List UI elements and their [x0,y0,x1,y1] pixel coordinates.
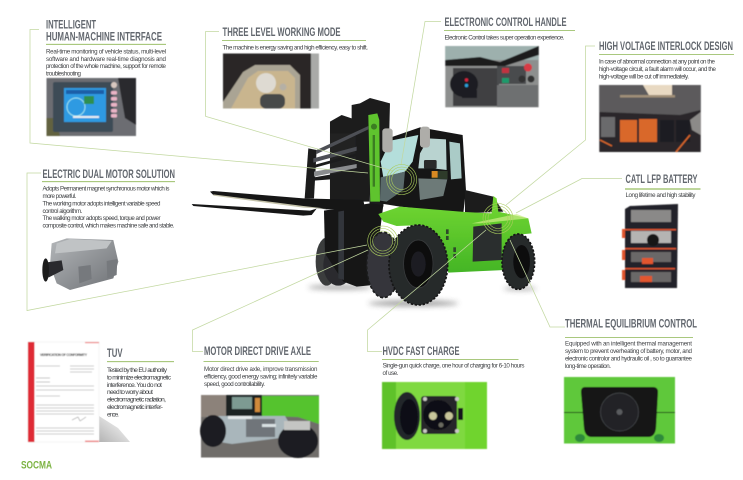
text block: Equipped with an intelligent thermal management [565,341,692,348]
leader: dual motor [27,173,367,310]
photo: HV connectors [599,85,701,152]
mirrors [382,127,430,152]
text block: electromagnetic radiation, [107,397,166,404]
callout ring: battery [483,204,513,234]
panel: three level working mode [222,27,368,108]
text block: Single-gun quick charge, one hour of charging for 6-10 hours [382,362,524,370]
mast rear [330,98,390,210]
leader: drive axle [192,250,368,352]
photo: touch display [46,78,136,136]
text block: high-voltage circuit, a fault alarm will occur, and the [599,66,717,73]
logo: SOCMA [21,460,52,472]
panel: intelligent human-machine interface [46,20,167,136]
green mast strip [368,113,380,202]
text block: electromagnetic interfer- [107,404,163,411]
leader: intelligent interface [30,30,368,173]
text block: Adopts Permanent magnet synchronous motor which is [42,186,170,192]
text block [599,58,717,80]
text block: ence. [107,411,119,418]
text block: efficiency, good energy saving; infinitely variable [204,374,318,380]
text block [565,341,693,370]
text block [107,367,172,418]
panel: motor direct drive axle [200,346,319,458]
text block: high-voltage will be cut off immediately. [599,74,689,80]
heading: MOTOR DIRECT DRIVE AXLE [204,346,311,358]
text block [42,186,175,230]
mast lower [324,203,383,287]
rear dual tyres [316,238,353,286]
text block: long-time operation. [565,363,611,370]
text block: troubleshooting [46,70,82,77]
text block: electronic controlor and hydraulic oil , so to guarrantee [565,356,693,362]
leader: fast charge [368,230,486,352]
text block: Electronic Control takes super operation experience. [444,34,565,42]
callout ring: axle [368,226,398,256]
heading: THREE LEVEL WORKING MODE [222,27,341,39]
text block: more powerful. [42,193,77,200]
body [378,196,532,273]
leader: battery [516,178,622,213]
carriage frame [305,126,369,202]
heading: ELECTRIC DUAL MOTOR SOLUTION [42,169,175,181]
panel: TUV [28,342,174,442]
text block: speed, good controllability. [204,381,265,388]
text block: software and hardware real-time diagnosis and [46,56,167,63]
text block: Tested by the EU authority [107,367,168,374]
photo: battery pack [622,204,678,288]
panel: electric dual motor solution [42,169,175,290]
rear steer wheel [502,234,535,289]
text block: control algorithm. [42,208,83,215]
panel: high voltage interlock design [599,41,734,152]
leader: control handle [401,22,441,165]
leader: thermal [510,240,565,327]
photo: motor [42,238,118,290]
text block [46,48,167,77]
text block: to minimize electromagnetic [107,374,172,381]
heading: HUMAN-MACHINE INTERFACE [46,32,162,44]
certificate [28,342,99,442]
forks [192,191,365,216]
heading: ELECTRONIC CONTROL HANDLE [444,17,567,29]
callout ring: cab [387,164,417,194]
text block: In case of abnormal connection at any point on the [599,58,716,66]
panel: HVDC fast charge [382,346,524,449]
heading: HVDC FAST CHARGE [382,346,460,358]
text block: Real-time monitoring of vehicle status, multi-level [46,48,166,56]
heading: INTELLIGENT [46,20,96,32]
text block: The working motor adopts intelligent variable speed [42,200,161,207]
cab [380,127,503,213]
leader: three level mode [206,32,393,171]
photo: control handle [445,46,539,107]
text block: The walking motor adopts speed, torque and power [42,215,160,222]
panel: thermal equilibrium control [564,318,697,444]
heading: CATL LFP BATTERY [626,174,698,186]
photo: mode dial [223,54,319,108]
certificate: VERIFICATION OF CONFORMITY [40,353,88,357]
photo: drive axle [200,395,319,458]
panel: CATL LFP battery [622,174,700,288]
forklift [192,98,537,306]
heading: TUV [107,348,123,360]
ground shadows [308,285,537,306]
text block: protection of the whole machine, support for remote [46,63,167,70]
heading [46,20,162,44]
text block: The machine is energy saving and high efficiency, easy to shift. [222,44,368,52]
grille [473,223,502,262]
certificate shadow [99,416,130,442]
text block: need to worry about [107,389,153,396]
text block: of use. [382,370,399,377]
text block [204,366,318,388]
photo: cooling fan [564,377,675,444]
leader: high voltage [506,46,595,205]
panel: electronic control handle [444,17,575,107]
text block: Motor direct drive axle, improve transmission [204,366,318,373]
text block: system to prevent overheating of battery, motor, and [565,348,693,355]
text block: composite control, which makes machine safe and stable. [42,222,175,230]
photo: charging socket [382,382,487,449]
text block: Long lifetime and high stability [626,192,696,199]
text block [382,362,524,377]
text block: interference. You do not [107,382,162,389]
front tyres [367,225,448,305]
